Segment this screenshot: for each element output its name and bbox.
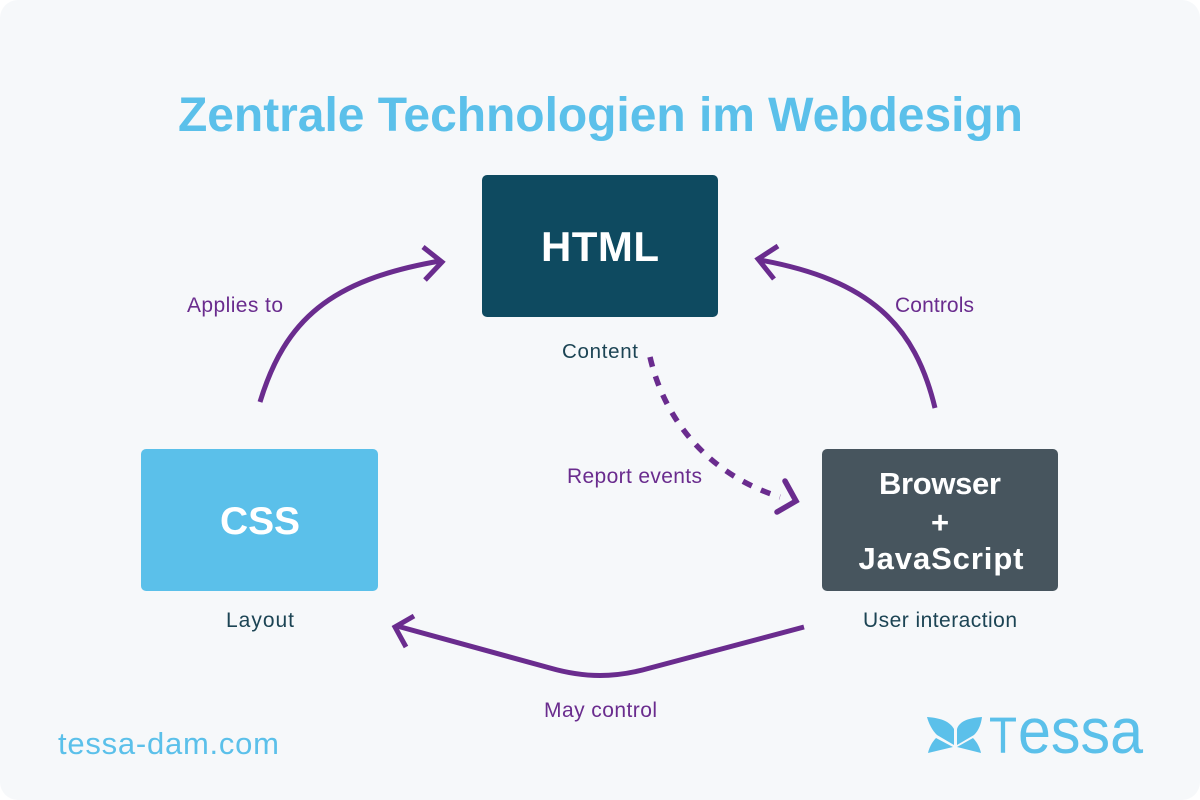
box: Browser + JavaScript: JavaScript	[858, 541, 1024, 576]
arrow: Browser may control CSS	[395, 616, 804, 676]
box: Browser + JavaScript: +	[931, 505, 949, 540]
box: HTML: HTML	[541, 223, 659, 270]
label: May control: May control	[544, 699, 657, 722]
label: Controls: Controls	[895, 294, 974, 317]
label: Report events: Report events	[567, 465, 702, 488]
box: Browser + JavaScript	[822, 449, 1058, 591]
box: Browser + JavaScript: Browser	[879, 466, 1001, 501]
label: Applies to: Applies to	[187, 294, 283, 317]
arrow: Browser controls HTML	[758, 246, 935, 408]
box: CSS: CSS	[220, 500, 300, 543]
title: Zentrale Technologien im Webdesign	[178, 89, 1023, 142]
label: Content: Content	[562, 340, 638, 363]
label: Layout: Layout	[226, 609, 294, 632]
arrow: HTML reports events to browser	[650, 357, 796, 512]
box: CSS	[141, 449, 378, 591]
arrow: CSS applies to HTML	[260, 247, 442, 402]
website url: tessa-dam.com	[58, 726, 279, 761]
box: HTML	[482, 175, 718, 317]
wordmark: T	[989, 707, 1017, 764]
logo: tessa	[927, 695, 1143, 767]
icon: butterfly	[927, 717, 982, 753]
wordmark: essa	[1018, 695, 1143, 767]
label: User interaction: User interaction	[863, 609, 1017, 632]
